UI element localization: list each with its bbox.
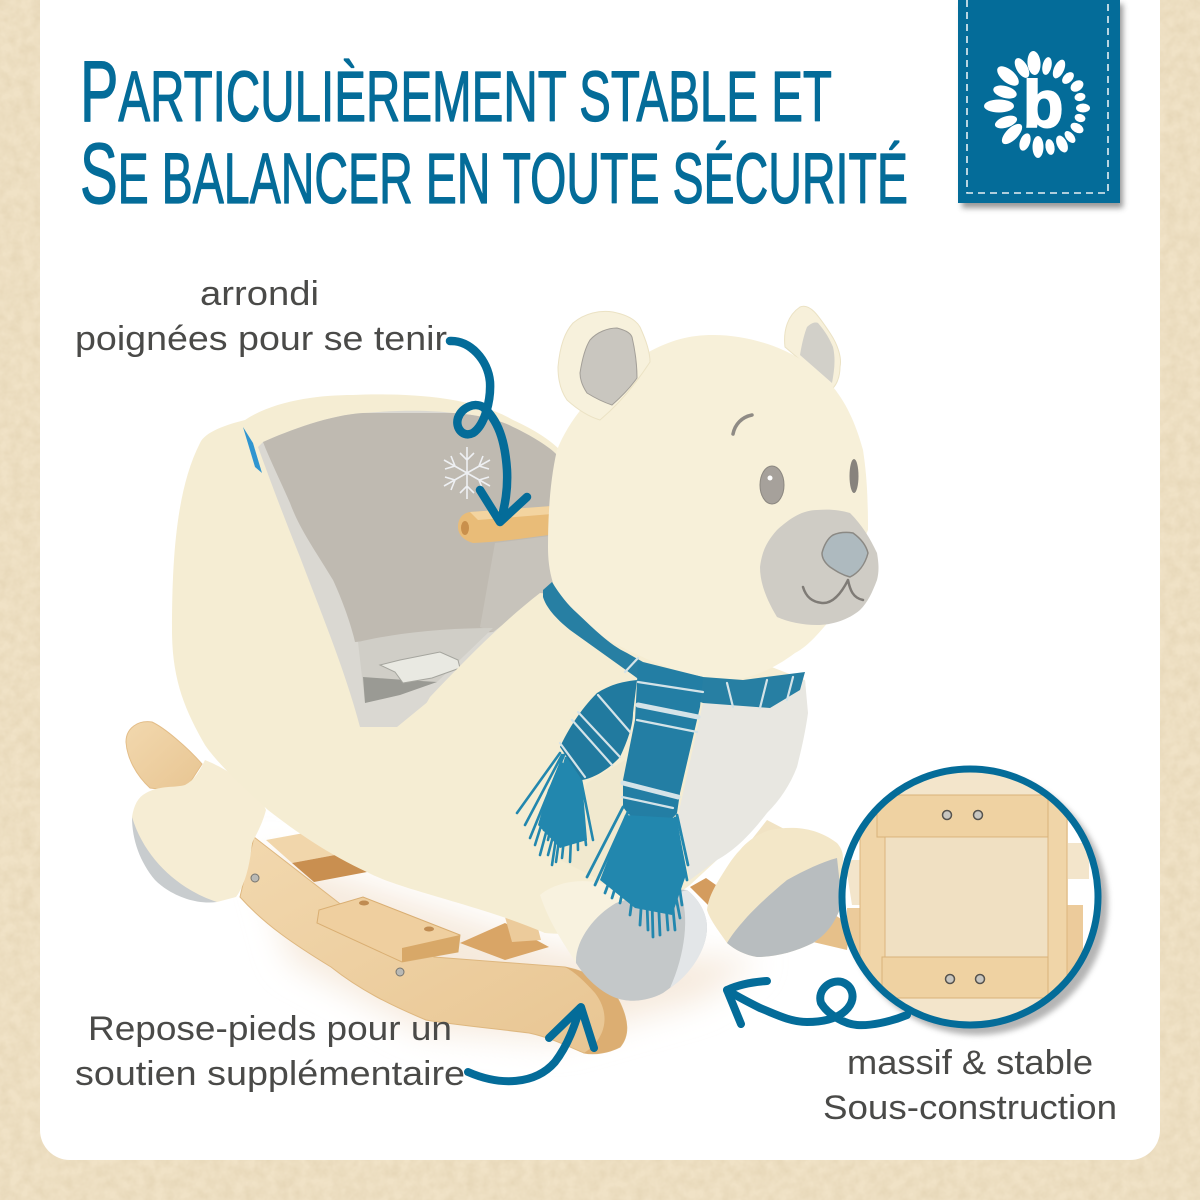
head — [548, 335, 868, 680]
belly — [677, 680, 808, 880]
back-right foot — [707, 828, 843, 957]
cream behind scarf — [560, 760, 640, 880]
label: rounded handles — [75, 275, 447, 358]
seat belt buckle — [380, 652, 460, 683]
front tail — [623, 663, 703, 827]
rocker: back tip — [126, 722, 202, 792]
neck band — [543, 582, 805, 708]
verticals — [860, 815, 885, 985]
back tail — [560, 680, 637, 780]
seat backrest — [263, 413, 557, 642]
mouth — [803, 580, 863, 603]
ear right — [785, 306, 841, 388]
arrow: sturdy base — [727, 981, 907, 1025]
floor shadow — [260, 850, 760, 1040]
label: rounded handles: arrondi — [200, 275, 319, 313]
inset: underside — [842, 765, 1108, 1035]
seat cushion — [358, 628, 493, 703]
front tail fringe — [587, 807, 688, 937]
label: sturdy base: massif & stable — [847, 1044, 1093, 1082]
rails — [877, 795, 1048, 837]
label: footrest: soutien supplémentaire — [75, 1055, 465, 1093]
bolts — [942, 810, 984, 984]
seat side panel — [480, 535, 557, 632]
eyes — [760, 466, 784, 504]
logo badge — [958, 0, 1123, 208]
eyebrow — [733, 415, 752, 434]
rocker rungs — [266, 820, 850, 960]
snowflake — [444, 447, 490, 499]
label: rounded handles: poignées pour se tenir — [75, 320, 447, 358]
back tail fringe — [517, 753, 593, 865]
nose — [822, 532, 868, 577]
snout — [760, 510, 878, 625]
rocking bear illustration — [126, 306, 878, 1054]
inset shadow — [846, 773, 1108, 1035]
chair shell and body — [172, 394, 806, 934]
arrow: handles — [450, 341, 527, 522]
rocker: side rail — [240, 837, 627, 1054]
chest — [407, 593, 640, 933]
harness strip — [363, 677, 437, 703]
face — [733, 415, 878, 625]
scarf stripes — [560, 658, 793, 808]
front foot — [540, 881, 707, 1001]
label: sturdy base: Sous-construction — [823, 1089, 1117, 1127]
label: sturdy base — [823, 1044, 1117, 1127]
back-left foot — [132, 760, 266, 903]
icon: flower logo: b — [1023, 67, 1063, 141]
title — [80, 44, 908, 222]
bolts — [251, 874, 404, 976]
side wood — [847, 908, 860, 954]
label: footrest: Repose-pieds pour un — [88, 1010, 452, 1048]
wooden handle — [458, 506, 552, 543]
blue tag — [243, 427, 262, 473]
label: footrest — [75, 1010, 465, 1093]
rocker: end edge — [565, 967, 627, 1054]
icon: flower logo — [984, 50, 1090, 158]
ear left — [558, 311, 650, 420]
footrest — [317, 897, 460, 962]
title: PARTICULIÈREMENT STABLE ET — [80, 44, 832, 140]
scarf — [517, 582, 805, 937]
seat interior — [243, 411, 560, 727]
arrow: footrest — [468, 1007, 594, 1081]
